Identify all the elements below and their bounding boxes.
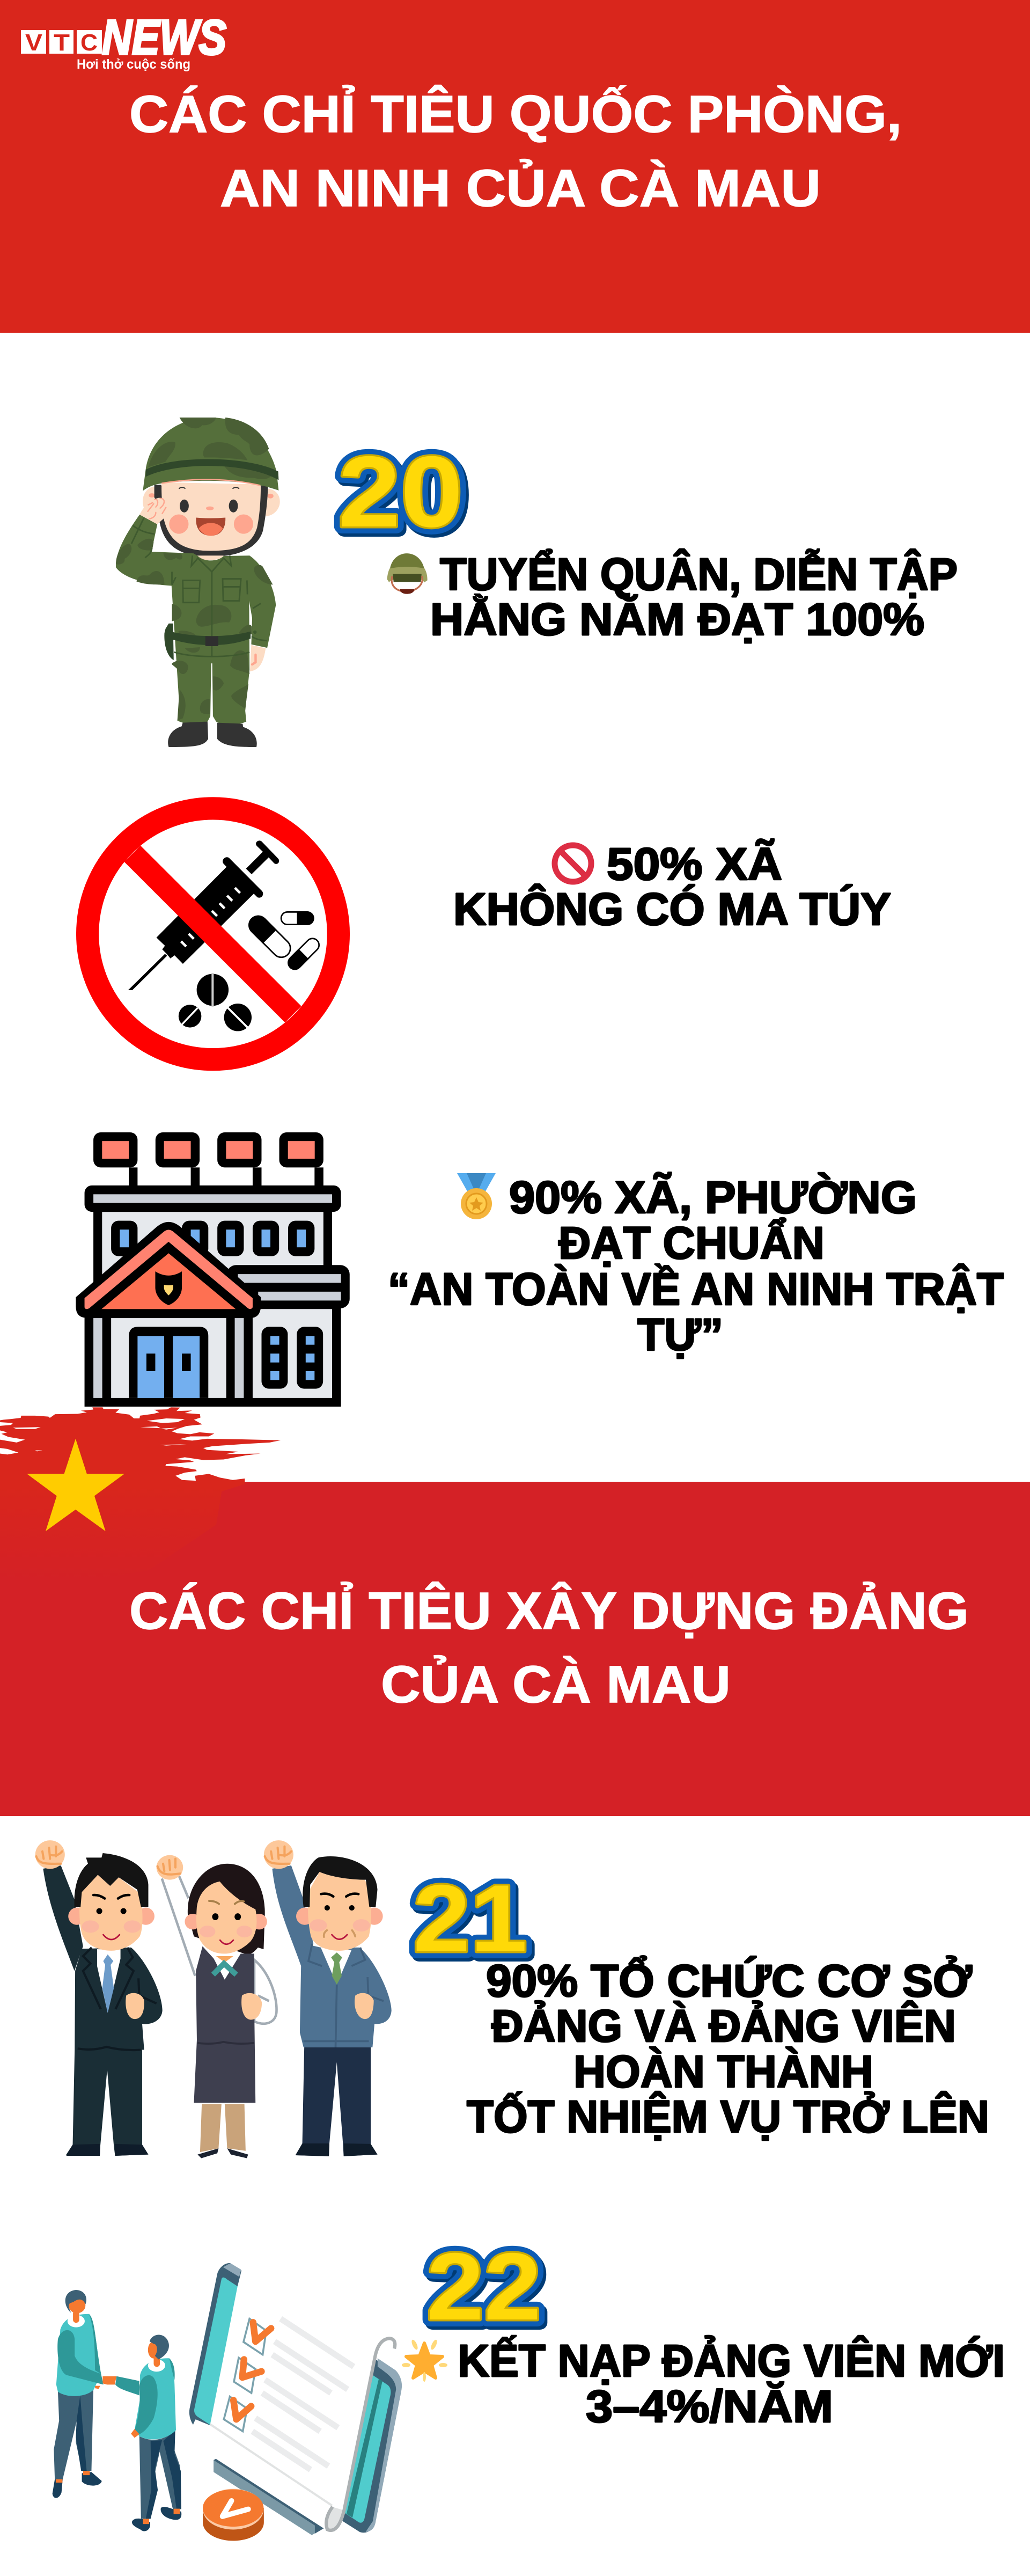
text: 50 percent communes	[453, 839, 891, 934]
panel: header quoc phong	[0, 0, 1030, 333]
woman in vest	[157, 1855, 277, 2158]
pills	[179, 973, 252, 1031]
text: new party members: KẾT NẠP ĐẢNG VIÊN MỚI	[458, 2336, 1005, 2386]
icon: no drugs sign	[87, 808, 339, 1059]
logo: VTC News: C	[80, 30, 98, 56]
text: tuyen quan: HẰNG NĂM ĐẠT 100%	[430, 594, 924, 645]
text: 50 percent communes: KHÔNG CÓ MA TÚY	[453, 884, 891, 934]
illustration: handshake and checklist	[53, 2250, 402, 2541]
text: 90 percent security standard: TỰ”	[637, 1309, 723, 1360]
title: xay dung dang: CÁC CHỈ TIÊU XÂY DỰNG ĐẢNG	[129, 1582, 969, 1640]
orange badge	[203, 2489, 264, 2541]
capsules	[244, 911, 322, 972]
text: 90 percent party organisations: TỐT NHIỆM VỤ TRỞ LÊN	[467, 2091, 989, 2142]
number: 22: 22	[426, 2233, 541, 2340]
person left	[53, 2290, 116, 2498]
logo: VTC News: NEWS	[102, 10, 226, 65]
title: quoc phong an ninh	[129, 85, 902, 217]
logo: VTC News: Hơi thở cuộc sống	[77, 57, 190, 72]
logo: VTC News: T	[54, 30, 70, 56]
text: 90 percent party organisations	[467, 1956, 989, 2142]
icon: medal emoji	[457, 1173, 496, 1219]
decoration: brushed flag	[0, 1407, 281, 1582]
number: 21: 21	[413, 1865, 527, 1972]
icon: helmet emoji	[387, 553, 428, 594]
logo: VTC News: V	[25, 30, 43, 56]
number: 21: 21	[413, 1865, 527, 1972]
person right	[115, 2334, 181, 2531]
tablet with checklist	[189, 2250, 402, 2535]
number: 22: 22	[426, 2233, 541, 2340]
star	[27, 1439, 124, 1531]
text: 90 percent party organisations: HOÀN THÀNH	[573, 2046, 873, 2097]
title: xay dung dang: CỦA CÀ MAU	[381, 1655, 731, 1714]
panel: header xay dung dang	[0, 1407, 1030, 1816]
title: xay dung dang	[129, 1582, 969, 1714]
text: 90 percent party organisations: ĐẢNG VÀ ĐẢNG VIÊN	[491, 2001, 956, 2051]
number: 20: 20	[338, 435, 463, 548]
text: 90 percent security standard: 90% XÃ, PHƯỜNG	[509, 1172, 917, 1223]
syringe	[128, 840, 279, 990]
man in dark suit	[35, 1840, 163, 2156]
number: 20: 20	[338, 435, 463, 548]
text: tuyen quan	[430, 549, 958, 645]
roof	[76, 1222, 261, 1318]
text: new party members: 3–4%/NĂM	[586, 2381, 833, 2432]
text: 90 percent security standard	[388, 1172, 1004, 1360]
text: 90 percent security standard: ĐẠT CHUẨN	[558, 1218, 825, 1268]
text: 90 percent security standard: “AN TOÀN VỀ AN NINH TRẬT	[388, 1264, 1004, 1314]
title: quoc phong an ninh: AN NINH CỦA CÀ MAU	[220, 159, 821, 217]
illustration: saluting soldier	[116, 418, 280, 747]
man in blue jacket	[264, 1840, 392, 2156]
text: new party members	[458, 2336, 1005, 2432]
title: quoc phong an ninh: CÁC CHỈ TIÊU QUỐC PHÒNG,	[129, 85, 902, 143]
door	[129, 1327, 208, 1398]
text: 50 percent communes: 50% XÃ	[607, 839, 782, 889]
icon: no entry emoji	[555, 845, 591, 882]
icon: sparkling star emoji	[402, 2339, 447, 2382]
illustration: three people raising fists	[35, 1840, 392, 2158]
illustration: government building	[76, 1132, 350, 1407]
text: 90 percent party organisations: 90% TỔ CHỨC CƠ SỞ	[486, 1956, 972, 2006]
text: tuyen quan: TUYỂN QUÂN, DIỄN TẬP	[440, 549, 958, 599]
logo: VTC News	[21, 10, 226, 72]
